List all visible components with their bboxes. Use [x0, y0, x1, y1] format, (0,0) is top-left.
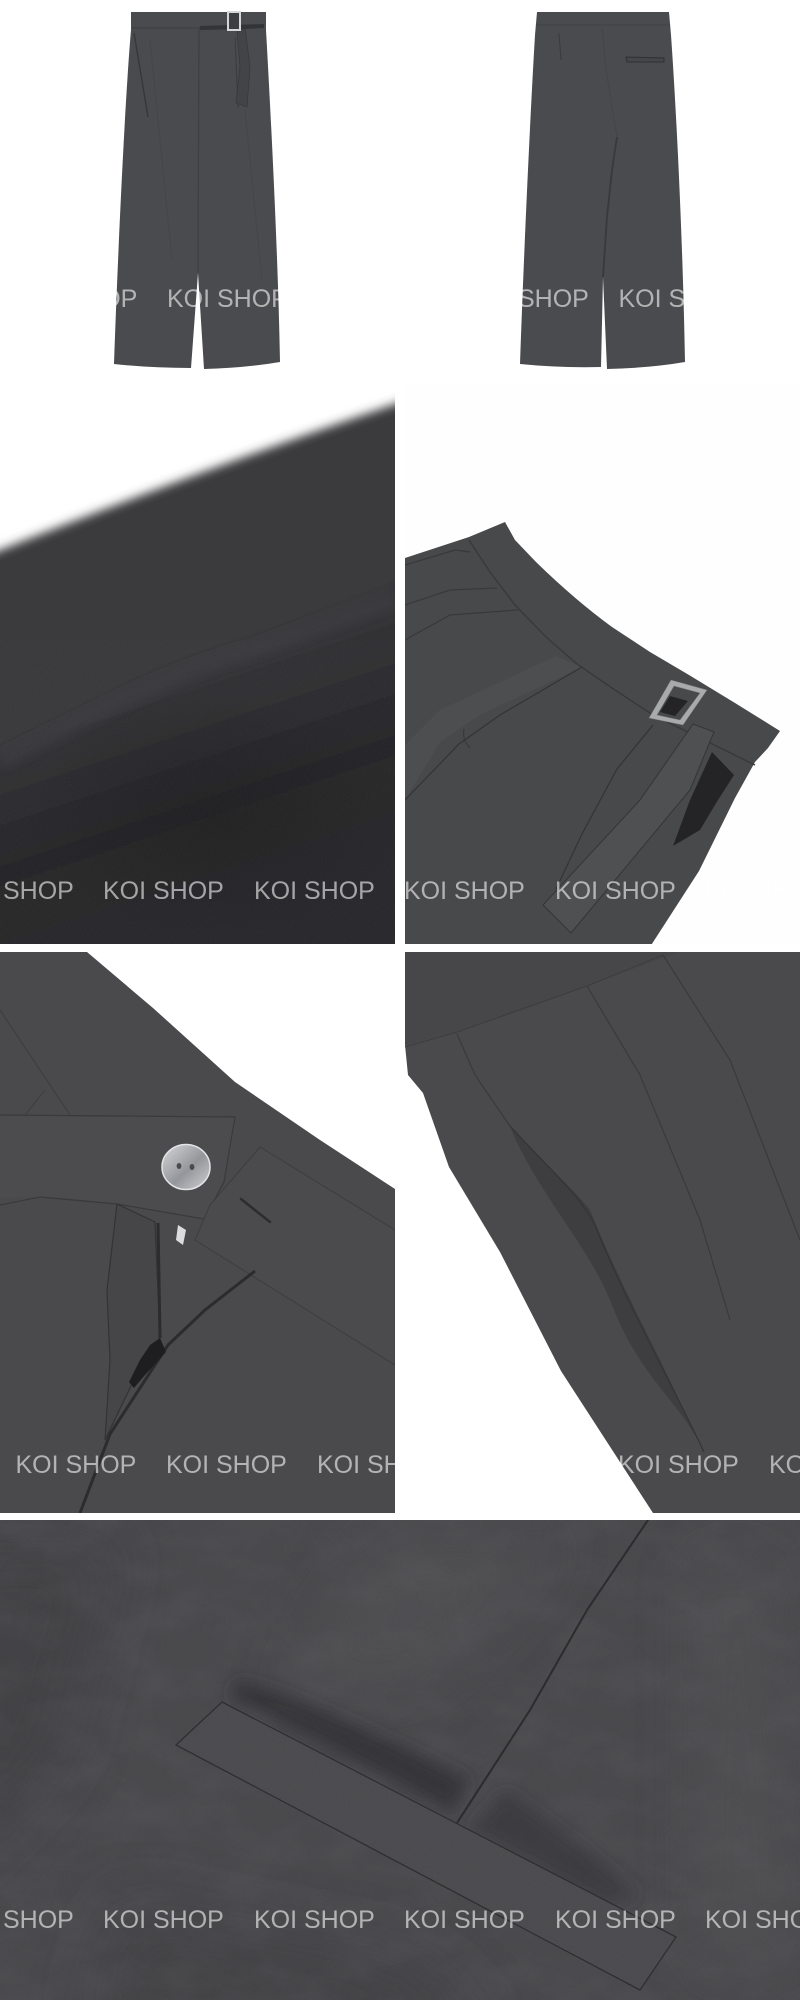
zipper tape — [80, 1223, 255, 1513]
front pleat fold — [405, 656, 582, 800]
waistband garment shape — [405, 522, 780, 950]
watermark row 2: KOI SHOP — [103, 877, 224, 905]
watermark row 2: KOI SHOP — [404, 877, 525, 905]
watermark row 3: KOI SHOP — [317, 1451, 438, 1479]
garment body — [405, 952, 800, 1513]
fabric grain — [0, 640, 395, 944]
fabric grain — [0, 1520, 800, 2000]
trousers front silhouette — [114, 12, 280, 369]
pocket edge — [510, 1126, 704, 1452]
panel: button and zipper close-up — [0, 952, 395, 1513]
waist seam — [405, 955, 663, 1047]
buckle strap — [660, 696, 688, 716]
fold highlight — [0, 600, 395, 762]
watermark row 1: KOI SHOP — [16, 285, 137, 313]
dark fabric shadow — [25, 695, 405, 935]
front seams and pleats — [132, 28, 262, 280]
zipper pull — [129, 1338, 166, 1388]
panel: welt pocket close-up — [0, 1520, 800, 2000]
watermark row 1: KOI SHOP — [618, 285, 739, 313]
watermark row 1: KOI SHOP — [318, 285, 438, 313]
watermark row 3: KOI SHOP — [468, 1451, 588, 1479]
watermark row 4: KOI SHOP — [103, 1906, 224, 1934]
watermark row 4: KOI SHOP — [555, 1906, 676, 1934]
trousers back silhouette — [520, 12, 685, 369]
panel: waistband and buckle close-up — [405, 522, 780, 944]
pocket opening — [511, 1128, 694, 1433]
upper seams — [0, 1010, 70, 1115]
watermark row 4: KOI SHOP — [254, 1906, 375, 1934]
watermark row 2 — [0, 877, 800, 905]
front pleats — [405, 550, 653, 889]
dark vertical seam — [457, 1520, 648, 1823]
panel: fabric close-up — [0, 395, 395, 944]
belt strap — [200, 24, 264, 30]
button — [162, 1144, 210, 1190]
soft folds — [0, 1540, 790, 2000]
garment body — [0, 952, 395, 1513]
pleats — [457, 955, 800, 1320]
watermark row 3: KOI SHOP — [618, 1451, 739, 1479]
watermark row 4 — [0, 1906, 800, 1934]
welt pocket flap — [176, 1702, 676, 1990]
dark inner lining — [673, 752, 734, 846]
waist tab stitching — [0, 1115, 235, 1219]
left fly — [105, 1204, 160, 1440]
waist tab — [0, 1115, 235, 1219]
watermark row 3: KOI SHOP — [16, 1451, 136, 1479]
hanging belt strap — [543, 724, 714, 933]
panel: side pocket close-up — [405, 952, 800, 1513]
waistband — [405, 952, 680, 1045]
white gap — [176, 1225, 186, 1245]
watermark row 1: KOI SHOP — [468, 285, 589, 313]
watermark row 1: KOI SHOP — [167, 285, 288, 313]
upper fabric fold — [0, 395, 395, 764]
buttonhole — [241, 1199, 270, 1222]
fabric mottling — [0, 1520, 800, 2000]
back welt pocket — [626, 57, 664, 62]
lower fabric fold — [0, 639, 395, 944]
panel: trousers back view — [520, 12, 685, 369]
shadow beside pocket — [470, 1790, 640, 1905]
watermark row 2: KOI SHOP — [555, 877, 676, 905]
off-white backdrop — [405, 383, 800, 944]
watermark row 3: KOI SHOP — [166, 1451, 287, 1479]
metal buckle — [649, 680, 707, 725]
back seams — [536, 25, 670, 277]
belt tail — [236, 27, 250, 107]
panel: trousers front view — [114, 12, 280, 369]
fabric base — [0, 1520, 800, 2000]
pocket shadow — [228, 1680, 470, 1812]
watermark row 3 — [16, 1451, 800, 1479]
watermark row 4: KOI SHOP — [404, 1906, 525, 1934]
metal buckle — [228, 12, 240, 30]
watermark row 2: KOI SHOP — [254, 877, 375, 905]
waistband inner seam — [469, 540, 755, 765]
watermark row 1 — [16, 285, 800, 313]
right waistband layer — [195, 1147, 395, 1365]
